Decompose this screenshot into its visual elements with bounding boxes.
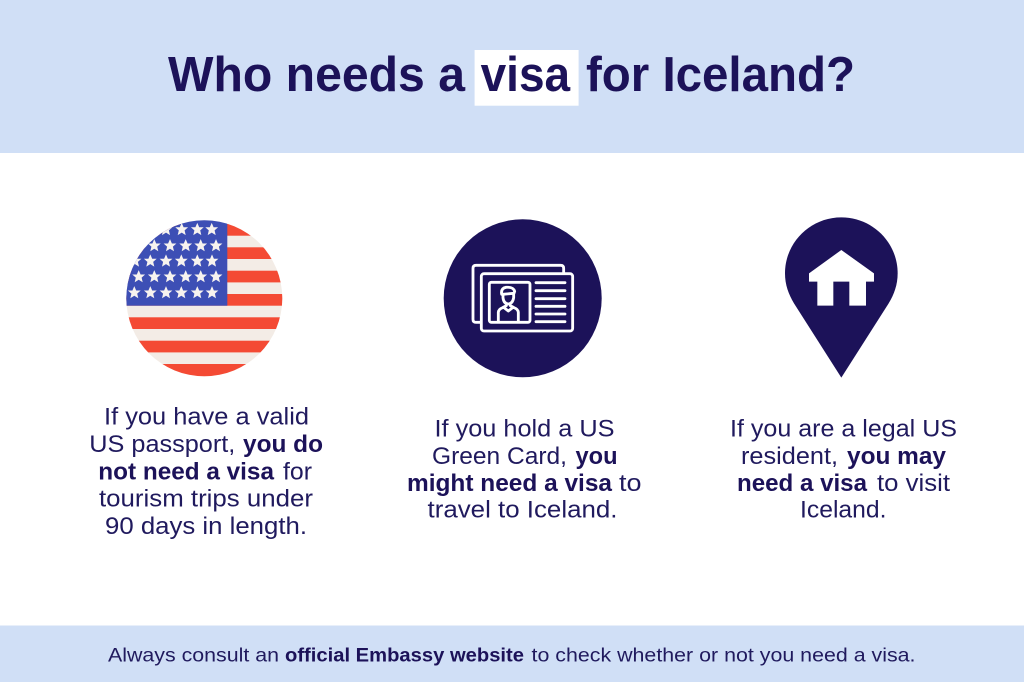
text: legal resident: you may (847, 443, 946, 470)
highlighted word box (475, 50, 579, 106)
icon: US flag (126, 220, 282, 376)
footer note: Always consult an (108, 644, 279, 666)
text: Green Card: If you hold a US (434, 416, 614, 443)
icon: location pin with house (785, 217, 898, 378)
footer note (108, 644, 916, 666)
text: Green Card (407, 416, 642, 524)
text: US passport: tourism trips under (99, 486, 313, 513)
text: legal resident: Iceland. (800, 497, 886, 524)
text: Green Card: travel to Iceland. (428, 497, 618, 524)
text: Green Card: Green Card, (432, 443, 567, 470)
title: Who needs a (168, 48, 466, 102)
footer note: to check whether or not you need a visa. (532, 644, 916, 666)
text: US passport: not need a visa (98, 458, 274, 485)
text: Green Card: you (576, 443, 618, 470)
title (168, 48, 855, 106)
text: legal resident: resident, (741, 443, 838, 470)
text: Green Card: might need a visa (407, 470, 612, 497)
text: US passport: for (283, 458, 312, 485)
text: US passport: you do (243, 431, 323, 458)
title: visa (481, 48, 571, 102)
footer note: official Embassy website (285, 644, 524, 666)
text: legal resident: need a visa (737, 470, 867, 497)
header band (0, 0, 1024, 153)
text: US passport: US passport, (89, 431, 235, 458)
text: legal resident: to visit (877, 470, 950, 497)
text: legal resident (730, 416, 957, 524)
text: Green Card: to (619, 470, 642, 497)
text: legal resident: If you are a legal US (730, 416, 957, 443)
text: US passport: 90 days in length. (105, 513, 307, 540)
title: for Iceland? (586, 48, 855, 102)
text: US passport (89, 403, 323, 540)
text: US passport: If you have a valid (104, 403, 309, 430)
footer band (0, 626, 1024, 682)
icon: ID card (444, 219, 602, 377)
